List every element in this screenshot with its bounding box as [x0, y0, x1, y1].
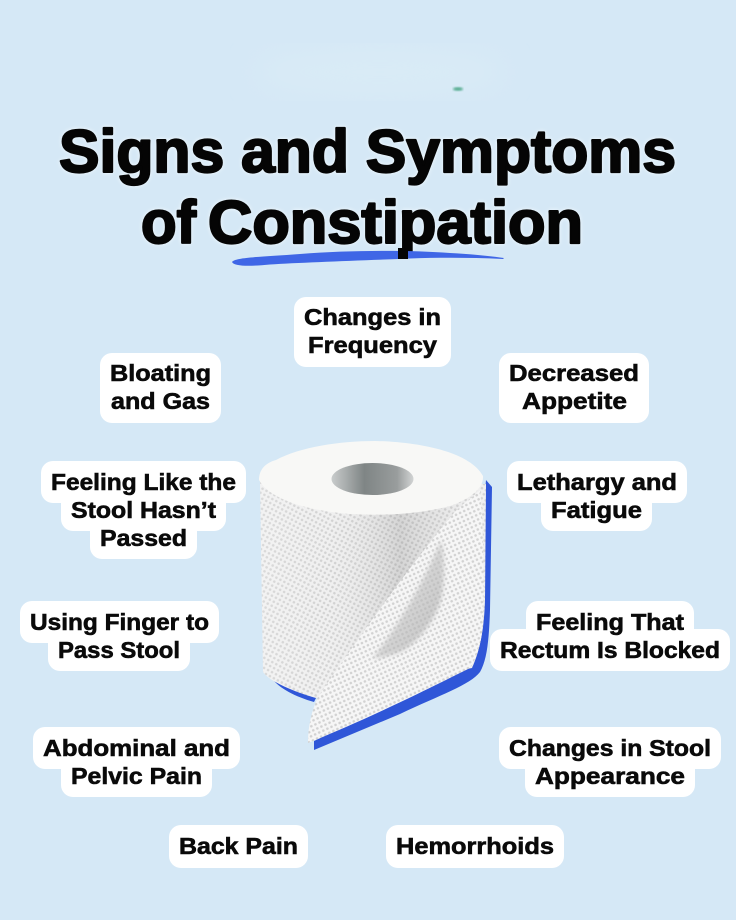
- flap: [308, 490, 484, 743]
- label: Bloating and Gas: Bloating: [110, 360, 211, 386]
- label: Decreased Appetite: Decreased: [509, 360, 639, 386]
- roll body: [260, 482, 486, 698]
- label: Bloating and Gas: and Gas: [111, 388, 210, 414]
- faint smudge at top: [255, 48, 505, 96]
- label: Bloating and Gas: [100, 353, 221, 423]
- label: Feeling Like the Stool Hasn't Passed: Passed: [100, 525, 187, 551]
- label: Changes in Stool Appearance: Changes in Stool: [509, 735, 711, 761]
- label: Decreased Appetite: [499, 353, 649, 423]
- label: Feeling Like the Stool Hasn't Passed: Stool Hasn’t: [71, 497, 216, 523]
- title: of: [141, 189, 197, 256]
- label: Decreased Appetite: Appetite: [522, 388, 627, 414]
- title: Signs and Symptoms: [59, 118, 676, 185]
- label: Changes in Frequency: Changes in: [304, 304, 441, 330]
- label: Feeling That Rectum Is Blocked: [490, 601, 730, 671]
- body shading: [260, 482, 486, 698]
- label: Feeling That Rectum Is Blocked: Rectum Is Blocked: [500, 637, 720, 663]
- title: Constipation: [208, 189, 583, 256]
- label: Abdominal and Pelvic Pain: Abdominal and: [43, 735, 230, 761]
- label: Hemorrhoids: Hemorrhoids: [396, 833, 554, 859]
- title: [59, 118, 676, 256]
- label: Using Finger to Pass Stool: Using Finger to: [30, 609, 209, 635]
- label: Using Finger to Pass Stool: [20, 601, 219, 671]
- inner hole: [332, 463, 414, 495]
- label: Changes in Frequency: [294, 297, 451, 367]
- label: Feeling Like the Stool Hasn't Passed: [41, 461, 246, 559]
- label: Feeling That Rectum Is Blocked: Feeling That: [536, 609, 684, 635]
- label: Lethargy and Fatigue: [507, 461, 687, 531]
- roll top: [259, 441, 483, 515]
- blue backing left: [268, 668, 320, 702]
- label: Abdominal and Pelvic Pain: Pelvic Pain: [71, 763, 202, 789]
- p descender over underline: [398, 248, 408, 259]
- label: Lethargy and Fatigue: Fatigue: [551, 497, 642, 523]
- label: Back Pain: Back Pain: [179, 833, 298, 859]
- blue backing right: [314, 480, 492, 750]
- label: Using Finger to Pass Stool: Pass Stool: [58, 637, 180, 663]
- flap fold: [373, 540, 444, 658]
- label: Back Pain: [169, 825, 308, 868]
- label: Hemorrhoids: [386, 825, 564, 868]
- label: Changes in Stool Appearance: [499, 727, 721, 797]
- label: Abdominal and Pelvic Pain: [33, 727, 240, 797]
- brush underline: [232, 251, 504, 266]
- toilet paper roll: [259, 441, 492, 750]
- label: Lethargy and Fatigue: Lethargy and: [517, 469, 677, 495]
- label: Feeling Like the Stool Hasn't Passed: Feeling Like the: [51, 469, 236, 495]
- label: Changes in Stool Appearance: Appearance: [535, 763, 685, 789]
- label: Changes in Frequency: Frequency: [308, 332, 437, 358]
